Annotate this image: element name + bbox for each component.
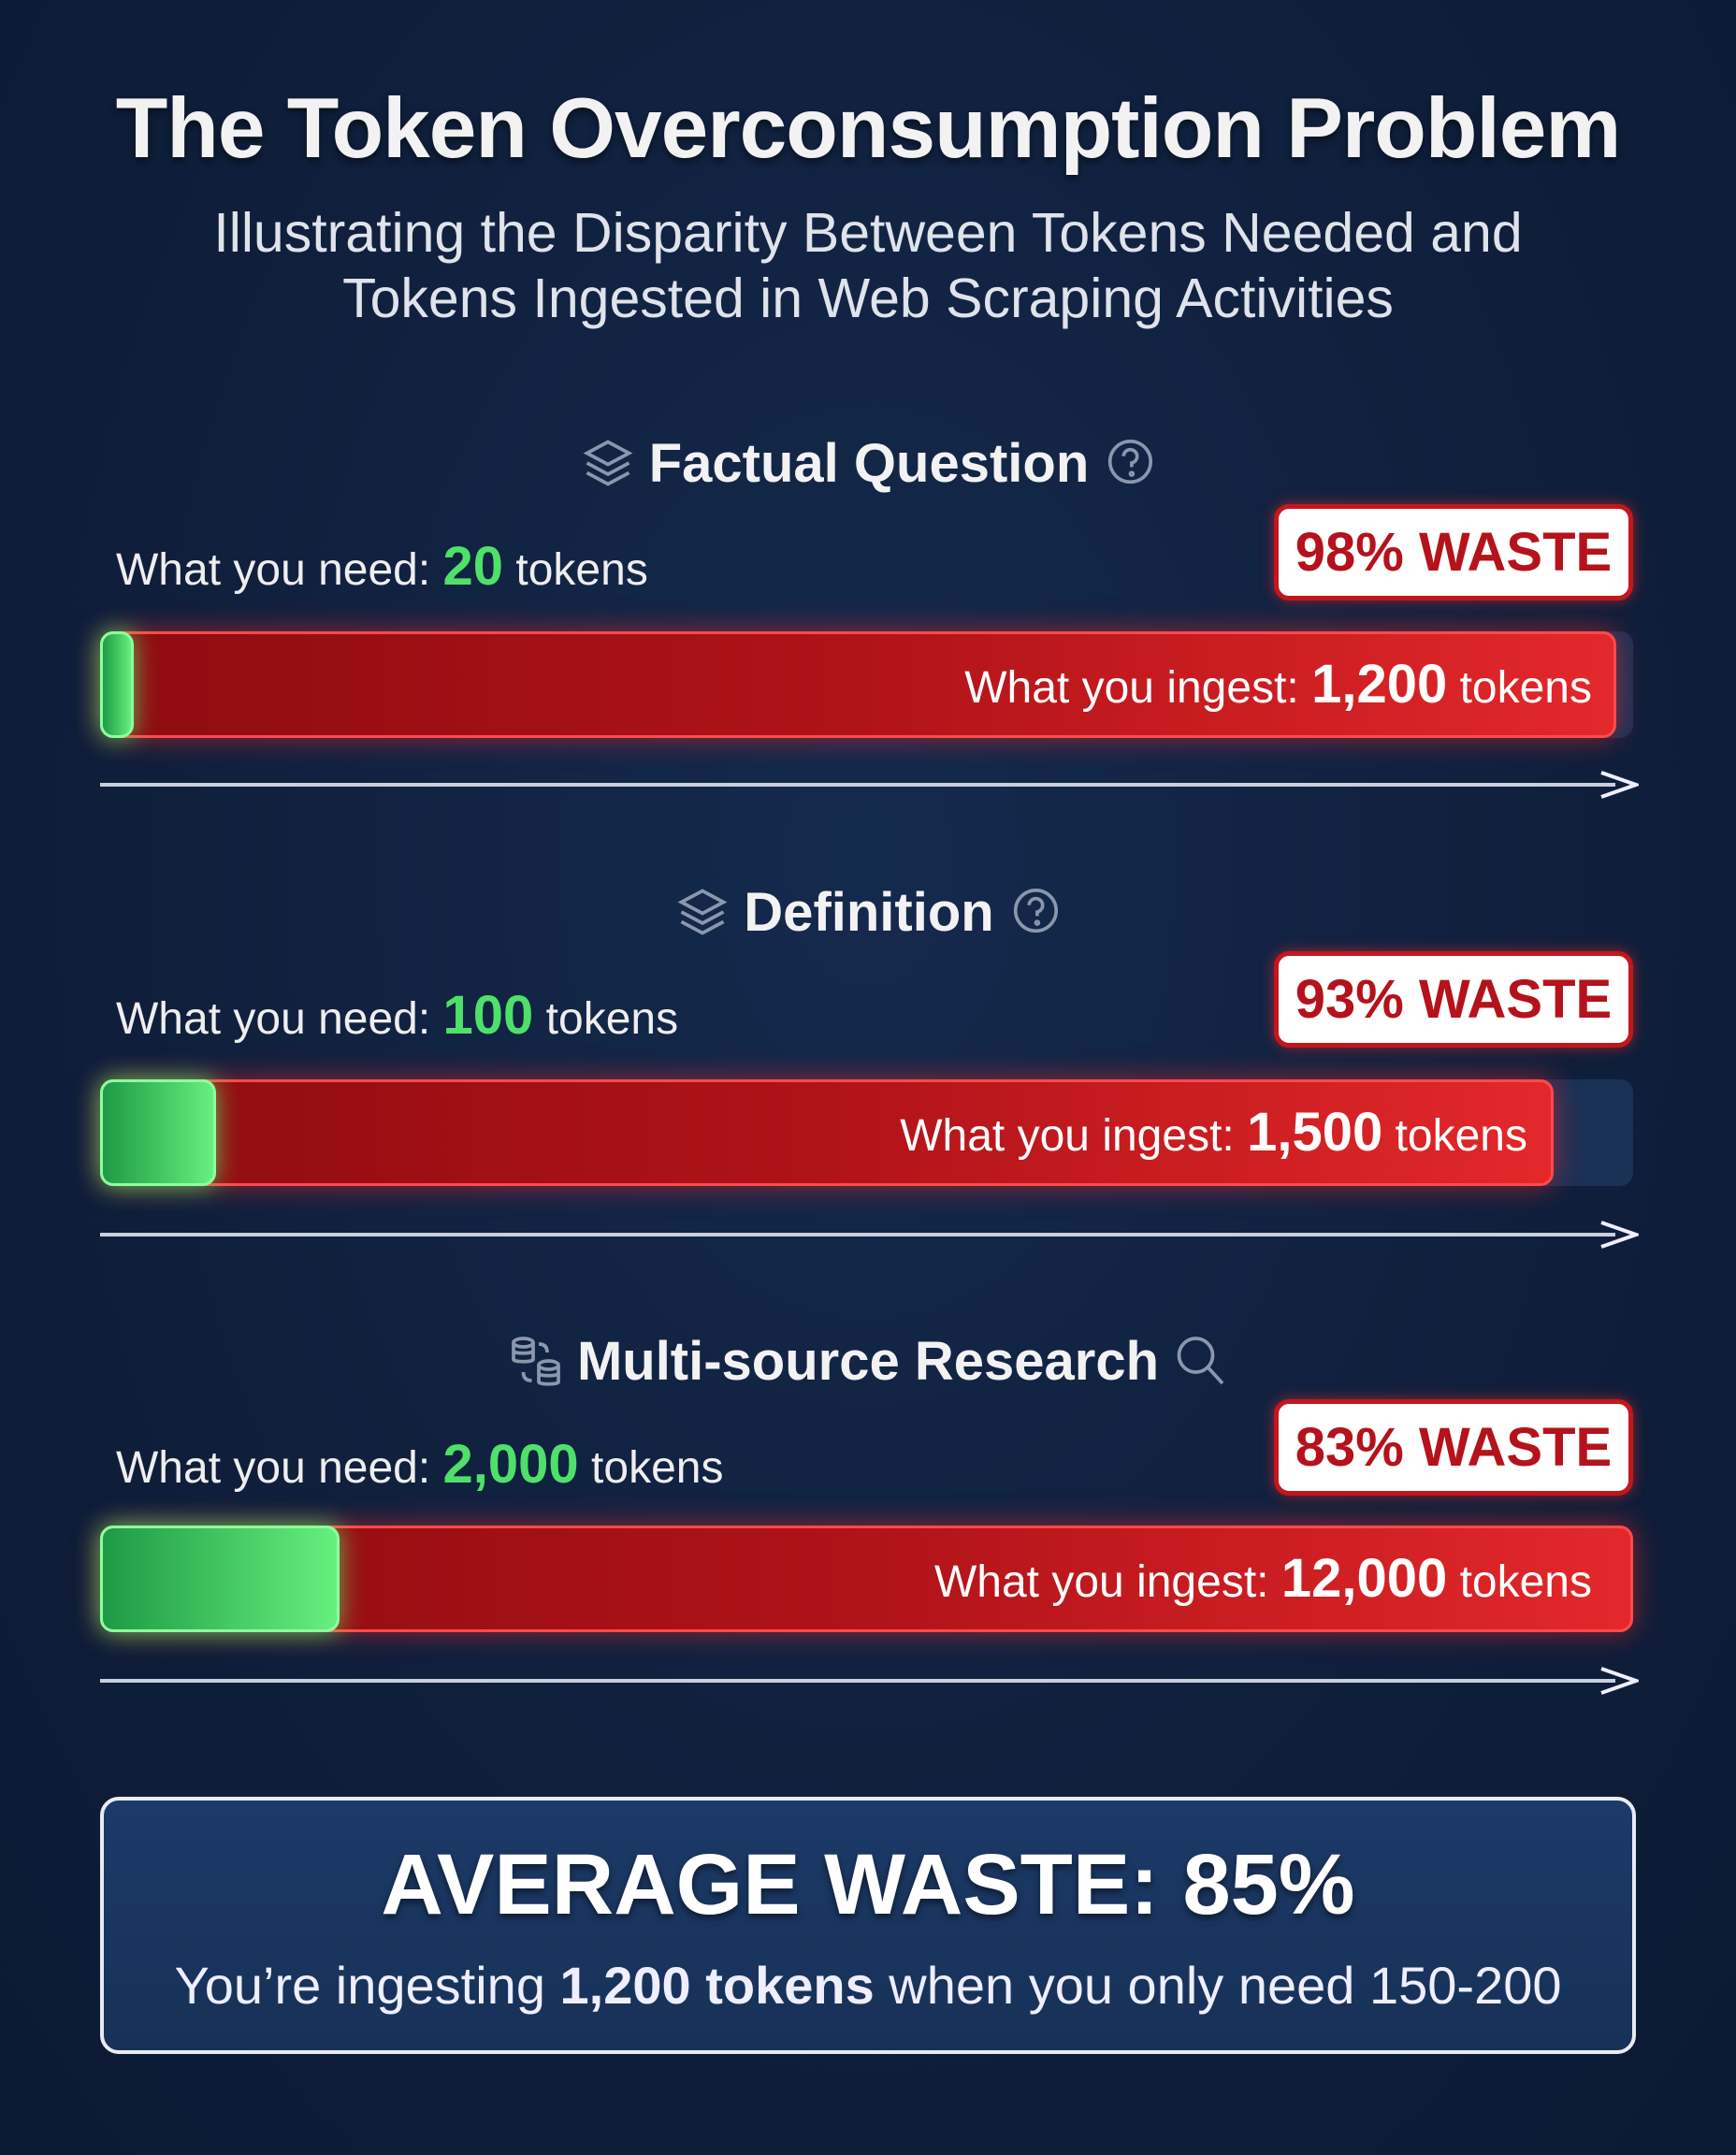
- badge: 93% WASTE: [1295, 969, 1612, 1030]
- summary text: You’re ingesting 1,200 tokens when you only need 150-200: [174, 1956, 1562, 2015]
- subtitle: Tokens Ingested in Web Scraping Activities: [342, 268, 1394, 329]
- bar: [100, 631, 1633, 738]
- bar: [100, 1526, 1633, 1632]
- heading: factual question: Factual Question: [649, 432, 1089, 494]
- need text: What you need: 20 tokens: [116, 536, 648, 597]
- axis arrow: [100, 1667, 1639, 1695]
- axis arrow: [100, 1221, 1639, 1249]
- badge: 98% WASTE: [1295, 522, 1612, 583]
- badge: 83% WASTE: [1295, 1417, 1612, 1478]
- badge: [1274, 951, 1633, 1048]
- bar: What you ingest: 12,000 tokens: [934, 1548, 1592, 1609]
- subtitle: [213, 202, 1523, 329]
- summary box: [100, 1797, 1636, 2054]
- heading: definition: Definition: [744, 881, 994, 943]
- need text: What you need: 100 tokens: [116, 985, 678, 1046]
- subtitle: Illustrating the Disparity Between Tokens Needed and: [213, 202, 1523, 264]
- heading: multi-source research: Multi-source Research: [577, 1330, 1159, 1392]
- badge: [1274, 504, 1633, 600]
- title: The Token Overconsumption Problem: [116, 81, 1620, 176]
- bar: What you ingest: 1,200 tokens: [964, 654, 1592, 715]
- section: factual question: [80, 432, 1642, 799]
- section: definition: [80, 881, 1642, 1249]
- heading: definition: [677, 881, 1058, 943]
- badge: [1274, 1399, 1633, 1496]
- summary heading: AVERAGE WASTE: 85%: [381, 1837, 1355, 1932]
- axis arrow: [100, 771, 1639, 799]
- need text: What you need: 2,000 tokens: [116, 1434, 723, 1495]
- section: multi-source research: [80, 1330, 1654, 1695]
- bar: What you ingest: 1,500 tokens: [900, 1102, 1527, 1163]
- bar: [100, 1079, 1633, 1186]
